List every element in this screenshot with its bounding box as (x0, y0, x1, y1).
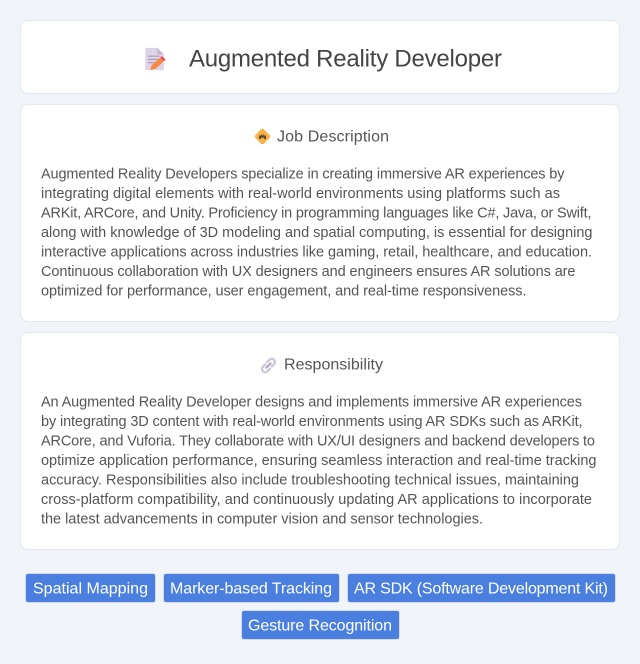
tag: AR SDK: AR SDK (Software Development Kit) (354, 580, 608, 598)
text block: job description body: optimized for performance, user engagement, and real-time responsiveness. (41, 284, 526, 300)
tag: spatial mapping: Spatial Mapping (33, 580, 148, 598)
tag: marker-based tracking: Marker-based Tracking (170, 580, 332, 598)
text block: job description body: Augmented Reality Developers specialize in creating immersive AR experiences by (41, 166, 565, 182)
tag: gesture recognition: Gesture Recognition (248, 618, 392, 634)
text block: responsibility body: ARCore, and Vuforia. They collaborate with UX/UI designers and backend developers to (41, 434, 595, 450)
icon: chain link (260, 358, 276, 374)
title: Augmented Reality Developer (189, 46, 502, 72)
text block: job description body: ARKit, ARCore, and Unity. Proficiency in programming languages like C#, Java, or Swift, (41, 206, 592, 222)
panel: title card (20, 20, 620, 94)
text block: job description body: along with knowledge of 3D modeling and spatial computing, is essential for designing (41, 225, 592, 241)
text block: responsibility body: optimize application performance, ensuring seamless interaction and real-time tracking (41, 453, 596, 469)
text block: responsibility body: An Augmented Reality Developer designs and implements immersive AR experiences (41, 394, 582, 410)
tag: marker-based tracking (163, 573, 340, 603)
heading: responsibility: Responsibility (284, 356, 383, 374)
panel: responsibility (20, 332, 620, 550)
panel: job description (20, 104, 620, 322)
tag: gesture recognition (241, 610, 400, 640)
text block: responsibility body: accuracy. Responsibilities also include troubleshooting technical issues, maintaining (41, 472, 579, 488)
text block: responsibility body: by integrating 3D content with real-world environments using AR SDKs such as ARKit, (41, 414, 582, 430)
text block: job description body: interactive applications across industries like gaming, retail, healthcare, and education. (41, 244, 592, 260)
text block: responsibility body: the latest advancements in computer vision and sensor technologies. (41, 512, 483, 528)
text block: job description body: integrating digital elements with real-world environments using platforms such as (41, 186, 560, 202)
icon: puzzle diamond (254, 128, 270, 144)
icon: document with pencil (145, 48, 166, 70)
text block: responsibility body: cross-platform compatibility, and continuously updating AR applications to incorporate (41, 492, 592, 508)
text block: job description body: Continuous collaboration with UX designers and engineers ensures AR solutions are (41, 264, 576, 280)
tag: spatial mapping (25, 573, 156, 603)
heading: job description: Job Description (277, 128, 389, 146)
tag: AR SDK (347, 573, 616, 603)
